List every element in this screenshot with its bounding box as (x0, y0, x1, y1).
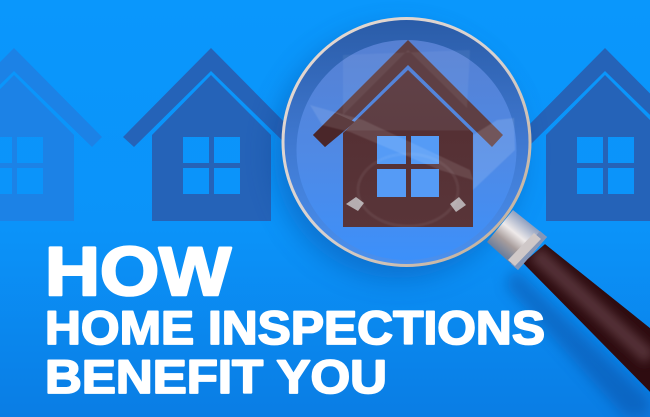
glass reflections (310, 50, 515, 226)
magnified roof shade (313, 113, 355, 147)
magnifying glass (282, 17, 650, 392)
house: faded left (0, 48, 102, 221)
magnified windows (377, 136, 439, 197)
title line: HOW: HOW (45, 233, 232, 310)
lens frame (282, 17, 532, 267)
handle grip (523, 244, 650, 392)
corner brackets (346, 197, 466, 212)
house: right (517, 48, 650, 221)
title line: BENEFIT YOU: BENEFIT YOU (45, 350, 387, 403)
magnified house (310, 40, 515, 227)
magnified house body (343, 70, 473, 227)
lens glass (284, 20, 528, 264)
metal collar (487, 210, 547, 270)
title (45, 233, 545, 403)
house: centre left (123, 48, 299, 221)
title line: HOME INSPECTIONS: HOME INSPECTIONS (45, 301, 545, 354)
magnifying glass shadow (274, 30, 650, 417)
inner glass disc (296, 40, 516, 260)
magnified roof (313, 40, 503, 147)
